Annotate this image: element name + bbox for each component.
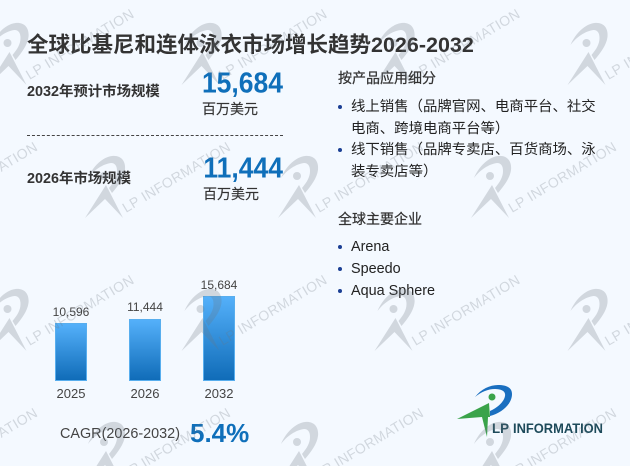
- watermark pattern: LP INFORMATION: [505, 138, 619, 216]
- bar: 2026: 2026: [131, 386, 159, 401]
- watermark pattern: LP INFORMATION: [312, 138, 426, 216]
- bullet list: segments: 线下销售（品牌专卖店、百货商场、泳: [351, 142, 596, 158]
- bullet list: companies: Aqua Sphere: [351, 283, 435, 299]
- watermark pattern: LP INFORMATION: [119, 138, 233, 216]
- bullet list: companies: [338, 239, 435, 299]
- label: 2026 market size: 2026年市场规模: [27, 171, 131, 187]
- watermark pattern: LP INFORMATION: [409, 5, 523, 83]
- watermark pattern: LP INFORMATION: [23, 5, 137, 83]
- bar: 2026: 11,444: [127, 300, 163, 314]
- bullet list: segments: 电商、跨境电商平台等）: [351, 121, 509, 137]
- bar: 2025: 10,596: [53, 305, 89, 319]
- CAGR value: 5.4%: [190, 418, 249, 448]
- bar: 2032: [201, 278, 237, 401]
- CAGR callout: [60, 418, 249, 448]
- title: 全球比基尼和连体泳衣市场增长趋势2026-2032: [27, 33, 474, 57]
- divider: [27, 135, 283, 136]
- bullet list: companies: Arena: [351, 239, 389, 255]
- bar: 2025: 2025: [57, 386, 85, 401]
- bullet list: companies: Speedo: [351, 261, 401, 277]
- watermark pattern: LP INFORMATION: [23, 271, 137, 349]
- unit: 百万美元: [203, 186, 259, 202]
- bullet list: segments: 线上销售（品牌官网、电商平台、社交: [351, 99, 596, 115]
- watermark pattern: LP INFORMATION: [216, 5, 330, 83]
- heading: product application segments: 按产品应用细分: [338, 70, 436, 86]
- logo: LP Information: [457, 385, 603, 437]
- logo: LP Information: LP: [492, 420, 509, 436]
- label: 2032 market size: 2032年预计市场规模: [27, 84, 160, 100]
- logo: LP Information: INFORMATION: [513, 420, 603, 436]
- bar chart: [53, 278, 237, 401]
- CAGR label: CAGR(2026-2032): [60, 426, 180, 442]
- bar: 2032: 15,684: [201, 278, 237, 292]
- bar: 2025: [53, 305, 89, 401]
- unit: 百万美元: [202, 101, 258, 117]
- bullet list: segments: 装专卖店等）: [351, 164, 437, 180]
- bullet list: segments: [338, 98, 596, 180]
- stat: 2026 market size: [27, 152, 283, 202]
- value: 11,444: 11,444: [203, 152, 283, 184]
- stat: 2032 market size: [27, 67, 283, 117]
- heading: key companies: 全球主要企业: [338, 211, 422, 227]
- watermark pattern: LP INFORMATION: [216, 271, 330, 349]
- value: 15,684: 15,684: [202, 67, 283, 99]
- bar: 2032: 2032: [205, 386, 233, 401]
- bar: 2026: [127, 300, 163, 401]
- watermark pattern: LP INFORMATION: [409, 271, 523, 349]
